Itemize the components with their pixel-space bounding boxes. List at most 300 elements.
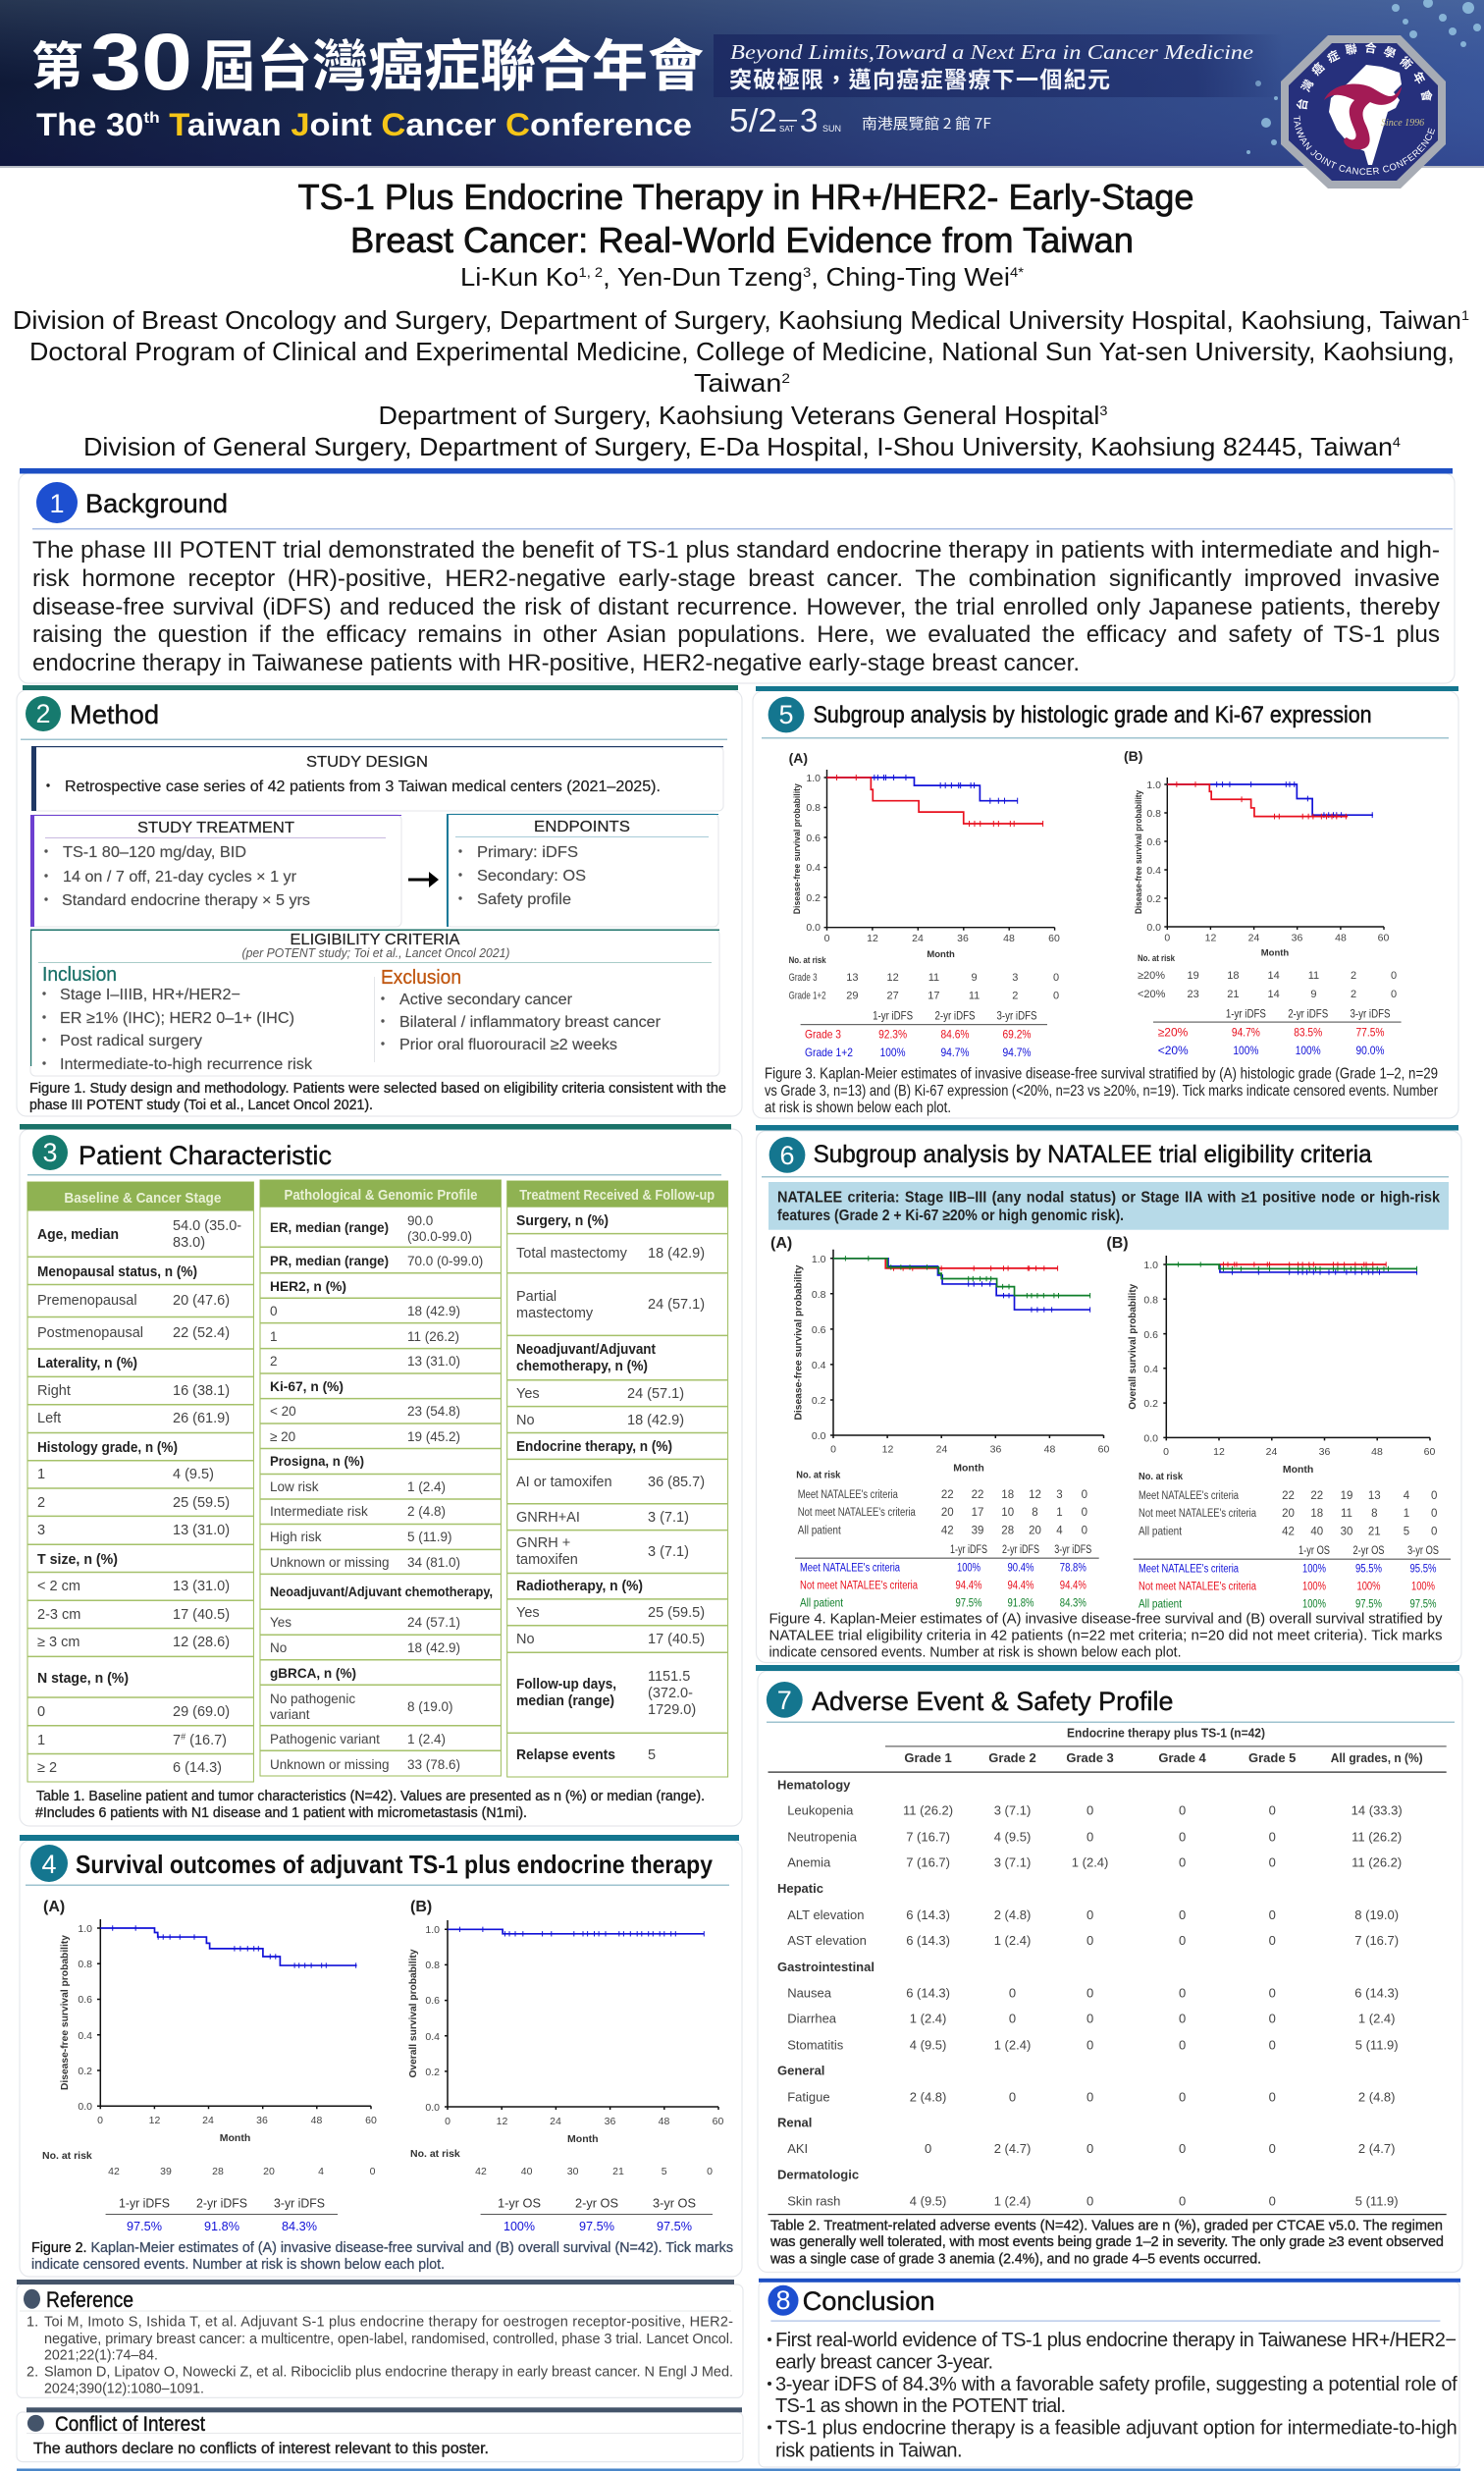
chart: Ki-67 Kaplan-Meier B: 9 — [1310, 989, 1316, 1000]
chart: Ki-67 Kaplan-Meier B: (B) — [1124, 748, 1142, 764]
chart: grade Kaplan-Meier A: No. at risk — [789, 955, 826, 966]
survival table Ki-67: <20% — [1158, 1044, 1189, 1057]
chart: NATALEE iDFS Kaplan-Meier A: Month — [953, 1463, 984, 1475]
survival table B: 100% — [504, 2219, 535, 2233]
chart: NATALEE iDFS Kaplan-Meier A: 0.4 — [812, 1360, 826, 1371]
chart: OS Kaplan-Meier B: 48 — [659, 2116, 669, 2127]
table: adverse events: Nausea — [787, 1985, 832, 2001]
table: adverse events: Diarrhea — [787, 2012, 837, 2026]
chart: OS Kaplan-Meier B: 0.0 — [425, 2102, 440, 2114]
survival table Ki-67: 3-yr iDFS — [1351, 1007, 1390, 1021]
box: endpoints: Secondary: OS — [477, 868, 586, 885]
chart: iDFS Kaplan-Meier A: 0.8 — [78, 1959, 92, 1970]
survival table grade: 94.7% — [940, 1046, 970, 1059]
survival table A — [106, 2195, 338, 2233]
chart: iDFS Kaplan-Meier A: 28 — [212, 2166, 224, 2177]
table column: pathological and genomic profile: variant — [270, 1707, 310, 1722]
table column: pathological and genomic profile: (30.0-99.0) — [407, 1229, 472, 1244]
icon: reference bullet — [24, 2289, 40, 2309]
table: adverse events: 2 (4.8) — [994, 1907, 1031, 1922]
table column: treatment received and follow-up: Neoadjuvant/Adjuvant — [516, 1342, 656, 1358]
table column: baseline and cancer stage: 6 (14.3) — [173, 1760, 222, 1776]
table column: treatment received and follow-up: 17 (40.5) — [648, 1632, 705, 1647]
table column: pathological and genomic profile: Pathogenic variant — [270, 1732, 380, 1746]
survival table grade: Grade 1+2 — [805, 1046, 853, 1059]
chart: NATALEE OS Kaplan-Meier B: 36 — [1319, 1446, 1330, 1458]
caption: figure 4: Figure 4. Kaplan-Meier estimates of (A) invasive disease-free survival and (B) overall survival stratified by — [769, 1610, 1443, 1628]
chart: OS Kaplan-Meier B — [407, 1899, 723, 2233]
caption: table 1: #Includes 6 patients with N1 disease and 1 patient with micrometastasis (N1mi). — [35, 1805, 527, 1821]
table: adverse events: 0 — [1179, 1985, 1186, 2001]
table column: baseline and cancer stage: 7 — [173, 1733, 181, 1748]
chart: NATALEE OS Kaplan-Meier B: 0.2 — [1143, 1398, 1158, 1410]
chart: grade Kaplan-Meier A: 9 — [972, 972, 978, 984]
chart: grade Kaplan-Meier A: (A) — [789, 750, 808, 766]
table column: pathological and genomic profile: Low risk — [270, 1479, 319, 1494]
icon: conflict bullet — [27, 2415, 44, 2432]
tagline — [729, 40, 1253, 94]
icon: number 4: 4 — [41, 1850, 57, 1879]
box: eligibility criteria: Intermediate-to-high recurrence risk — [60, 1056, 313, 1073]
survival table Ki-67: 77.5% — [1356, 1025, 1385, 1039]
box: study treatment — [30, 815, 401, 927]
chart: NATALEE iDFS Kaplan-Meier A: 0.8 — [812, 1289, 826, 1301]
table column: pathological and genomic profile: ER, median (range) — [270, 1219, 389, 1235]
chart: iDFS Kaplan-Meier A: Month — [220, 2132, 250, 2144]
chart: NATALEE iDFS Kaplan-Meier A: 18 — [1001, 1489, 1014, 1501]
box: endpoints: Safety profile — [477, 891, 571, 908]
caption: figure 3: at risk is shown below each plot. — [765, 1100, 951, 1116]
table: adverse events: 0 — [1179, 2193, 1186, 2208]
box: eligibility criteria: ELIGIBILITY CRITERIA — [291, 932, 460, 948]
survival table grade: 2-yr iDFS — [934, 1009, 976, 1023]
chart: Ki-67 Kaplan-Meier B: 0 — [1164, 933, 1170, 944]
table: adverse events: 0 — [1269, 2012, 1276, 2026]
chart: grade Kaplan-Meier A: 29 — [846, 990, 859, 1001]
survival table NATALEE iDFS: 90.4% — [1007, 1563, 1034, 1575]
chart: NATALEE OS Kaplan-Meier B: No. at risk — [1139, 1472, 1183, 1482]
table: adverse events: 0 — [1009, 2090, 1016, 2105]
table column: pathological and genomic profile: No — [270, 1640, 287, 1655]
reference list: 2024;390(12):1080–1091. — [44, 2382, 204, 2397]
table: adverse events: 0 — [925, 2141, 931, 2156]
survival table grade: 1-yr iDFS — [873, 1009, 913, 1023]
reference list: 2021;22(1):74–84. — [44, 2348, 158, 2364]
chart: OS Kaplan-Meier B: 0.4 — [425, 2031, 440, 2043]
chart: NATALEE iDFS Kaplan-Meier A: 20 — [941, 1507, 954, 1519]
chart: NATALEE iDFS Kaplan-Meier A: 0 — [1082, 1489, 1087, 1501]
chart: NATALEE OS Kaplan-Meier B: 13 — [1368, 1490, 1381, 1502]
caption: table 2: was generally well tolerated, with most events being grade 1–2 in severity. The only grade ≥3 event observed — [769, 2234, 1444, 2250]
chart: NATALEE OS Kaplan-Meier B: 0 — [1431, 1526, 1437, 1537]
panel: subgroup NATALEE — [756, 1125, 1461, 1663]
table column: baseline and cancer stage — [27, 1182, 253, 1782]
chart: OS Kaplan-Meier B: 36 — [605, 2116, 615, 2127]
box: study treatment: STUDY TREATMENT — [137, 820, 294, 836]
chart: OS Kaplan-Meier B: 60 — [713, 2116, 723, 2127]
caption: figure 1 — [29, 1081, 726, 1113]
chart: NATALEE iDFS Kaplan-Meier A: (A) — [770, 1235, 792, 1252]
conference title Chinese — [31, 18, 704, 107]
chart: NATALEE OS Kaplan-Meier B: All patient — [1139, 1526, 1183, 1537]
chart: iDFS Kaplan-Meier A: Disease-free survival probability — [59, 1935, 71, 2090]
conference title English: The 30 — [36, 107, 135, 142]
table column: baseline and cancer stage: 2 — [37, 1495, 45, 1511]
table column: pathological and genomic profile: HER2, n (%) — [270, 1278, 346, 1294]
chart: Ki-67 Kaplan-Meier B: 24 — [1248, 933, 1259, 944]
survival table A: 2-yr iDFS — [196, 2195, 247, 2211]
chart: NATALEE iDFS Kaplan-Meier A: 0.0 — [812, 1430, 826, 1442]
chart: NATALEE iDFS Kaplan-Meier A: 8 — [1032, 1507, 1038, 1519]
table: adverse events: 0 — [1269, 1985, 1276, 2001]
table: adverse events: 0 — [1269, 2090, 1276, 2105]
table column: treatment received and follow-up: median (range) — [516, 1693, 614, 1709]
box: study design — [31, 746, 723, 811]
table column: pathological and genomic profile: 1 (2.4) — [407, 1479, 446, 1494]
table: adverse events: 4 (9.5) — [994, 1830, 1031, 1844]
survival table NATALEE OS: 97.5% — [1409, 1598, 1437, 1610]
chart: NATALEE iDFS Kaplan-Meier A: Meet NATALEE's criteria — [798, 1489, 898, 1501]
chart: iDFS Kaplan-Meier A: 0 — [370, 2166, 376, 2177]
table: adverse events: 4 (9.5) — [910, 2193, 946, 2208]
chart: OS Kaplan-Meier B: 0.2 — [425, 2067, 440, 2078]
table: adverse events: 11 (26.2) — [1352, 1830, 1402, 1844]
affiliations — [13, 305, 1469, 461]
chart: OS Kaplan-Meier B: 0.8 — [425, 1960, 440, 1971]
caption: table 1 — [35, 1789, 705, 1821]
survival table grade — [801, 1009, 1047, 1059]
table column: baseline and cancer stage: 3 — [37, 1523, 45, 1538]
table column: treatment received and follow-up: AI or tamoxifen — [516, 1475, 612, 1490]
caption: figure 2: indicate censored events. Number at risk is shown below each plot. — [31, 2256, 445, 2273]
survival table NATALEE iDFS: 78.8% — [1060, 1563, 1086, 1575]
chart: grade Kaplan-Meier A: 0.0 — [806, 922, 821, 934]
table column: pathological and genomic profile: ≥ 20 — [270, 1429, 295, 1444]
authors: 4* — [1010, 264, 1025, 280]
survival table NATALEE iDFS: All patient — [800, 1598, 844, 1610]
table column: baseline and cancer stage: 20 (47.6) — [173, 1293, 230, 1309]
callout: NATALEE criteria — [768, 1182, 1449, 1230]
table column: pathological and genomic profile: 24 (57.1) — [407, 1615, 460, 1630]
caption: figure 4 — [769, 1610, 1443, 1661]
conclusion bullets: 3-year iDFS of 84.3% with a favorable safety profile, suggesting a potential role of — [775, 2374, 1458, 2395]
table: adverse events: 2 (4.8) — [1358, 2090, 1395, 2105]
box: study treatment: 14 on / 7 off, 21-day cycles × 1 yr — [63, 869, 297, 886]
survival table NATALEE OS: Meet NATALEE's criteria — [1139, 1563, 1239, 1575]
box: study design: Retrospective case series of 42 patients from 3 Taiwan medical centers (2021–2025). — [65, 779, 661, 795]
survival table NATALEE iDFS: 3-yr iDFS — [1054, 1544, 1092, 1556]
chart: grade Kaplan-Meier A: 1.0 — [806, 773, 821, 784]
poster title: Breast Cancer: Real-World Evidence from Taiwan — [350, 220, 1134, 260]
conference title Chinese: 30 — [90, 18, 192, 107]
poster title — [298, 177, 1193, 260]
table: adverse events: Dermatologic — [777, 2168, 859, 2182]
table: adverse events: 11 (26.2) — [903, 1802, 953, 1817]
box: endpoints: Primary: iDFS — [477, 844, 578, 861]
heading: subgroup grade: Subgroup analysis by histologic grade and Ki-67 expression — [814, 702, 1372, 728]
survival table NATALEE iDFS: 97.5% — [956, 1598, 981, 1610]
table column: pathological and genomic profile: 8 (19.0) — [407, 1699, 453, 1714]
survival table NATALEE OS: 1-yr OS — [1298, 1545, 1330, 1557]
date and venue: SUN — [822, 124, 841, 134]
chart: OS Kaplan-Meier B: 0 — [445, 2116, 450, 2127]
chart: NATALEE OS Kaplan-Meier B: 1 — [1404, 1508, 1409, 1520]
chart: iDFS Kaplan-Meier A: 24 — [202, 2115, 214, 2126]
survival table Ki-67: 100% — [1233, 1044, 1259, 1057]
survival table grade: 3-yr iDFS — [997, 1009, 1036, 1023]
table column: treatment received and follow-up: 5 — [648, 1747, 656, 1763]
heading: survival outcomes: Survival outcomes of adjuvant TS-1 plus endocrine therapy — [76, 1850, 713, 1879]
conclusion bullets: First real-world evidence of TS-1 plus endocrine therapy in Taiwanese HR+/HER2− — [775, 2330, 1457, 2351]
survival table NATALEE OS — [1134, 1545, 1451, 1610]
chart: NATALEE OS Kaplan-Meier B: 0 — [1163, 1446, 1169, 1458]
chart: OS Kaplan-Meier B: 5 — [662, 2166, 667, 2177]
table: adverse events: 0 — [1086, 2037, 1093, 2052]
date and venue: 5/2 — [729, 102, 777, 138]
chart: Ki-67 Kaplan-Meier B: 19 — [1187, 970, 1199, 982]
reference list: negative, primary breast cancer: a multicentre, open-label, randomised, controlled, phase 3 trial. Lancet Oncol. — [44, 2332, 733, 2347]
tagline band — [714, 34, 1283, 97]
icon: number 6 — [769, 1137, 805, 1173]
table: adverse events: Grade 2 — [988, 1750, 1036, 1765]
icon: number 1: 1 — [49, 489, 65, 518]
chart: Ki-67 Kaplan-Meier B: Month — [1261, 948, 1289, 958]
date and venue: 3 — [800, 102, 818, 138]
chart: grade Kaplan-Meier A: 12 — [886, 972, 899, 984]
table column: treatment received and follow-up: 3 (7.1) — [648, 1544, 689, 1560]
conference title English: Taiwan Joint Cancer Conference — [169, 107, 680, 142]
table column: pathological and genomic profile: 1 (2.4) — [407, 1732, 446, 1746]
table column: pathological and genomic profile: PR, median (range) — [270, 1253, 389, 1268]
chart: grade Kaplan-Meier A: 0 — [1053, 972, 1059, 984]
survival table NATALEE iDFS: 94.4% — [1007, 1581, 1034, 1592]
survival table NATALEE iDFS: 94.4% — [1060, 1581, 1086, 1592]
table column: baseline and cancer stage: 25 (59.5) — [173, 1495, 230, 1511]
chart: NATALEE iDFS Kaplan-Meier A: 4 — [1056, 1526, 1063, 1537]
chart: Ki-67 Kaplan-Meier B: <20% — [1138, 989, 1166, 1000]
table column: pathological and genomic profile: 18 (42.9) — [407, 1304, 460, 1318]
table column: pathological and genomic profile: gBRCA, n (%) — [270, 1665, 356, 1681]
icon: number 4 — [30, 1845, 68, 1882]
survival table NATALEE OS: 100% — [1302, 1563, 1326, 1575]
chart: NATALEE iDFS Kaplan-Meier A: 1.0 — [812, 1254, 826, 1265]
box: eligibility criteria: Active secondary cancer — [399, 992, 573, 1008]
chart: NATALEE OS Kaplan-Meier B: 20 — [1282, 1508, 1295, 1520]
table column: treatment received and follow-up: 1729.0) — [648, 1702, 696, 1718]
chart: NATALEE iDFS Kaplan-Meier A: 0 — [1082, 1507, 1087, 1519]
survival table NATALEE OS: 2-yr OS — [1352, 1545, 1385, 1557]
table column: baseline and cancer stage: 16 (38.1) — [173, 1383, 230, 1399]
chart: OS Kaplan-Meier B: 40 — [521, 2166, 533, 2177]
chart: NATALEE iDFS Kaplan-Meier A: No. at risk — [796, 1471, 841, 1480]
table column: baseline and cancer stage: (16.7) — [186, 1733, 227, 1748]
survival table NATALEE OS: 100% — [1302, 1581, 1326, 1592]
affiliations: Doctoral Program of Clinical and Experimental Medicine, College of Medicine, National Sun Yat-sen University, Kaohsiung, — [29, 337, 1455, 366]
chart: NATALEE OS Kaplan-Meier B: Meet NATALEE's criteria — [1139, 1490, 1239, 1502]
caption: figure 2 — [31, 2239, 733, 2273]
survival table grade: 84.6% — [940, 1027, 970, 1041]
survival table NATALEE iDFS: Meet NATALEE's criteria — [800, 1563, 900, 1575]
table column: pathological and genomic profile: < 20 — [270, 1404, 296, 1419]
chart: OS Kaplan-Meier B: 30 — [567, 2166, 579, 2177]
survival table NATALEE OS: 95.5% — [1355, 1563, 1382, 1575]
conclusion bullets: early breast cancer 3-year. — [775, 2352, 993, 2374]
chart: iDFS Kaplan-Meier A: 48 — [311, 2115, 322, 2126]
chart: NATALEE OS Kaplan-Meier B: 0.8 — [1143, 1294, 1158, 1306]
chart: grade Kaplan-Meier A: 0 — [1053, 990, 1059, 1001]
chart: NATALEE iDFS Kaplan-Meier A: Disease-free survival probability — [793, 1264, 805, 1420]
chart: iDFS Kaplan-Meier A: 0 — [97, 2115, 103, 2126]
panel: background — [19, 468, 1455, 683]
box: endpoints: ENDPOINTS — [534, 819, 630, 835]
chart: NATALEE iDFS Kaplan-Meier A — [770, 1235, 1109, 1610]
table: adverse events: 7 (16.7) — [906, 1830, 950, 1844]
chart: grade Kaplan-Meier A: 36 — [957, 933, 969, 944]
authors: , Ching-Ting Wei — [811, 262, 1010, 292]
table column: treatment received and follow-up: Relapse events — [516, 1747, 615, 1763]
chart: OS Kaplan-Meier B: 0 — [707, 2166, 713, 2177]
table: adverse events: 6 (14.3) — [906, 1933, 950, 1948]
chart: iDFS Kaplan-Meier A: 36 — [256, 2115, 268, 2126]
conclusion bullets: risk patients in Taiwan. — [775, 2441, 963, 2462]
table column: treatment received and follow-up: 3 (7.1) — [648, 1510, 689, 1526]
table: adverse events: 3 (7.1) — [994, 1855, 1031, 1870]
background text: endocrine therapy in Taiwanese patients with HR-positive, HER2-negative early-stage breast cancer. — [32, 650, 1080, 676]
chart: OS Kaplan-Meier B: 0.6 — [425, 1995, 440, 2007]
table column: baseline and cancer stage: 13 (31.0) — [173, 1579, 230, 1594]
chart: NATALEE iDFS Kaplan-Meier A: 48 — [1044, 1443, 1055, 1455]
chart: Ki-67 Kaplan-Meier B: 2 — [1351, 970, 1356, 982]
caption: figure 4: NATALEE trial eligibility criteria in 42 patients (n=22 met criteria; n=20 did not meet criteria). Tick marks — [769, 1628, 1443, 1643]
chart: grade Kaplan-Meier A: 0 — [824, 933, 830, 944]
icon: conference logo: Since 1996 — [1381, 118, 1424, 129]
panel: survival outcomes — [20, 1835, 742, 2277]
survival table NATALEE iDFS: Not meet NATALEE's criteria — [800, 1581, 918, 1592]
table column: treatment received and follow-up: tamoxifen — [516, 1552, 578, 1568]
chart: NATALEE OS Kaplan-Meier B: 0.4 — [1143, 1364, 1158, 1375]
chart: NATALEE OS Kaplan-Meier B: Not meet NATALEE's criteria — [1139, 1508, 1256, 1520]
icon: conference logo: TAIWAN JOINT CANCER CONFERENCE — [1294, 116, 1435, 175]
table column: pathological and genomic profile: 1 — [270, 1329, 278, 1344]
table column: pathological and genomic profile: 11 (26.2) — [407, 1329, 459, 1344]
survival table grade: 69.2% — [1003, 1027, 1032, 1041]
chart: NATALEE iDFS Kaplan-Meier A: 12 — [1029, 1489, 1041, 1501]
table: adverse events: 14 (33.3) — [1352, 1802, 1403, 1817]
table: adverse events: 0 — [1009, 2012, 1016, 2026]
chart: Ki-67 Kaplan-Meier B: 48 — [1335, 933, 1347, 944]
chart: OS Kaplan-Meier B: Overall survival probability — [407, 1949, 419, 2077]
table: adverse events: 0 — [1269, 2037, 1276, 2052]
chart: NATALEE OS Kaplan-Meier B: 19 — [1341, 1490, 1352, 1502]
table column: baseline and cancer stage: 22 (52.4) — [173, 1325, 230, 1341]
chart: grade Kaplan-Meier A — [789, 750, 1060, 1059]
chart: Ki-67 Kaplan-Meier B: 23 — [1187, 989, 1199, 1000]
conference title Chinese: 屆台灣癌症聯合年會 — [200, 35, 704, 98]
table column: treatment received and follow-up: Yes — [516, 1605, 540, 1621]
panel: conclusion — [759, 2279, 1460, 2467]
table: adverse events: 0 — [1086, 2141, 1093, 2156]
background text: The phase III POTENT trial demonstrated the benefit of TS-1 plus standard endocrine therapy in patients with intermediate and high- — [32, 537, 1440, 564]
table: adverse events: 0 — [1179, 1830, 1186, 1844]
table: adverse events: 8 (19.0) — [1354, 1907, 1399, 1922]
background text: disease-free survival (iDFS) and reduced the risk of distant recurrence. However, the trial enrolled only Japanese patients, thereby — [32, 594, 1440, 620]
table: adverse events: Fatigue — [787, 2090, 830, 2105]
panel: patient characteristic — [20, 1124, 742, 1826]
table: adverse events: 1 (2.4) — [1358, 2012, 1395, 2026]
date and venue — [729, 102, 991, 138]
survival table NATALEE iDFS: 84.3% — [1060, 1598, 1086, 1610]
survival table NATALEE iDFS: 100% — [957, 1563, 980, 1575]
heading: method: Method — [70, 700, 159, 729]
chart: NATALEE OS Kaplan-Meier B: 0.0 — [1143, 1433, 1158, 1445]
table column: pathological and genomic profile: 18 (42.9) — [407, 1640, 460, 1655]
chart: Ki-67 Kaplan-Meier B: 0.4 — [1146, 865, 1161, 877]
table column: treatment received and follow-up: 18 (42.9) — [627, 1413, 684, 1428]
chart: NATALEE OS Kaplan-Meier B: 4 — [1404, 1490, 1410, 1502]
table column: pathological and genomic profile: 23 (54.8) — [407, 1404, 460, 1419]
survival table NATALEE iDFS — [795, 1544, 1099, 1610]
heading: patient characteristic: Patient Characteristic — [79, 1141, 332, 1170]
table column: treatment received and follow-up: mastectomy — [516, 1306, 594, 1321]
chart: grade Kaplan-Meier A: 11 — [969, 990, 980, 1001]
background text: risk hormone receptor (HR)-positive, HER2-negative early-stage breast cancer. The combination significantly improved invasive — [32, 565, 1440, 592]
background text — [32, 537, 1440, 676]
table column: baseline and cancer stage: 1 — [37, 1467, 45, 1482]
chart: NATALEE OS Kaplan-Meier B: 1.0 — [1143, 1260, 1158, 1271]
chart: NATALEE iDFS Kaplan-Meier A: 0 — [1082, 1526, 1087, 1537]
chart: NATALEE iDFS Kaplan-Meier A: 22 — [972, 1489, 983, 1501]
icon: number 3 — [32, 1135, 68, 1170]
chart: NATALEE iDFS Kaplan-Meier A: 17 — [972, 1507, 983, 1519]
table column: pathological and genomic profile — [260, 1180, 501, 1776]
chart: grade Kaplan-Meier A: 12 — [867, 933, 878, 944]
table column: treatment received and follow-up: 25 (59.5) — [648, 1605, 705, 1621]
table: adverse events: 0 — [1269, 1855, 1276, 1870]
table: adverse events: Anemia — [787, 1855, 831, 1870]
table column: baseline and cancer stage: N stage, n (%) — [37, 1671, 129, 1687]
table: adverse events: 0 — [1086, 2090, 1093, 2105]
caption: figure 1: phase III POTENT study (Toi et al., Lancet Oncol 2021). — [29, 1098, 373, 1113]
box: endpoints — [447, 814, 718, 927]
table: adverse events: 3 (7.1) — [994, 1802, 1031, 1817]
chart: OS Kaplan-Meier B: Month — [567, 2133, 599, 2145]
table: adverse events: 0 — [1179, 1907, 1186, 1922]
chart: grade Kaplan-Meier A: Month — [927, 949, 955, 960]
table: adverse events: 0 — [1269, 1907, 1276, 1922]
chart: iDFS Kaplan-Meier A: No. at risk — [42, 2150, 92, 2162]
header banner — [0, 0, 1484, 188]
table: adverse events: 0 — [1269, 1802, 1276, 1817]
table column: treatment received and follow-up: Surgery, n (%) — [516, 1213, 609, 1229]
survival table NATALEE OS: 95.5% — [1409, 1563, 1437, 1575]
icon: number 5 — [768, 697, 804, 732]
chart: iDFS Kaplan-Meier A: 0.4 — [78, 2030, 92, 2042]
chart: grade Kaplan-Meier A: Disease-free survival probability — [792, 783, 803, 914]
table: adverse events: 0 — [1179, 1933, 1186, 1948]
chart: NATALEE OS Kaplan-Meier B: 0 — [1431, 1508, 1437, 1520]
callout: NATALEE criteria: NATALEE criteria: Stage IIB–III (any nodal status) or Stage IIA with ≥1 positive node or high-risk — [777, 1190, 1440, 1206]
chart: iDFS Kaplan-Meier A: (A) — [43, 1899, 65, 1915]
chart: Ki-67 Kaplan-Meier B: 0.0 — [1146, 922, 1161, 934]
chart: NATALEE iDFS Kaplan-Meier A: 39 — [972, 1526, 983, 1537]
icon: number 7: 7 — [777, 1686, 792, 1715]
caption: figure 1: Figure 1. Study design and methodology. Patients were selected based on eligibility criteria consistent with the — [29, 1081, 726, 1097]
table: adverse events: Grade 1 — [904, 1750, 952, 1765]
chart: NATALEE OS Kaplan-Meier B: 42 — [1282, 1526, 1295, 1537]
table: adverse events: Endocrine therapy plus TS-1 (n=42) — [1067, 1726, 1265, 1740]
table column: pathological and genomic profile: Neoadjuvant/Adjuvant chemotherapy, — [270, 1584, 493, 1599]
chart: Ki-67 Kaplan-Meier B: 18 — [1227, 970, 1240, 982]
